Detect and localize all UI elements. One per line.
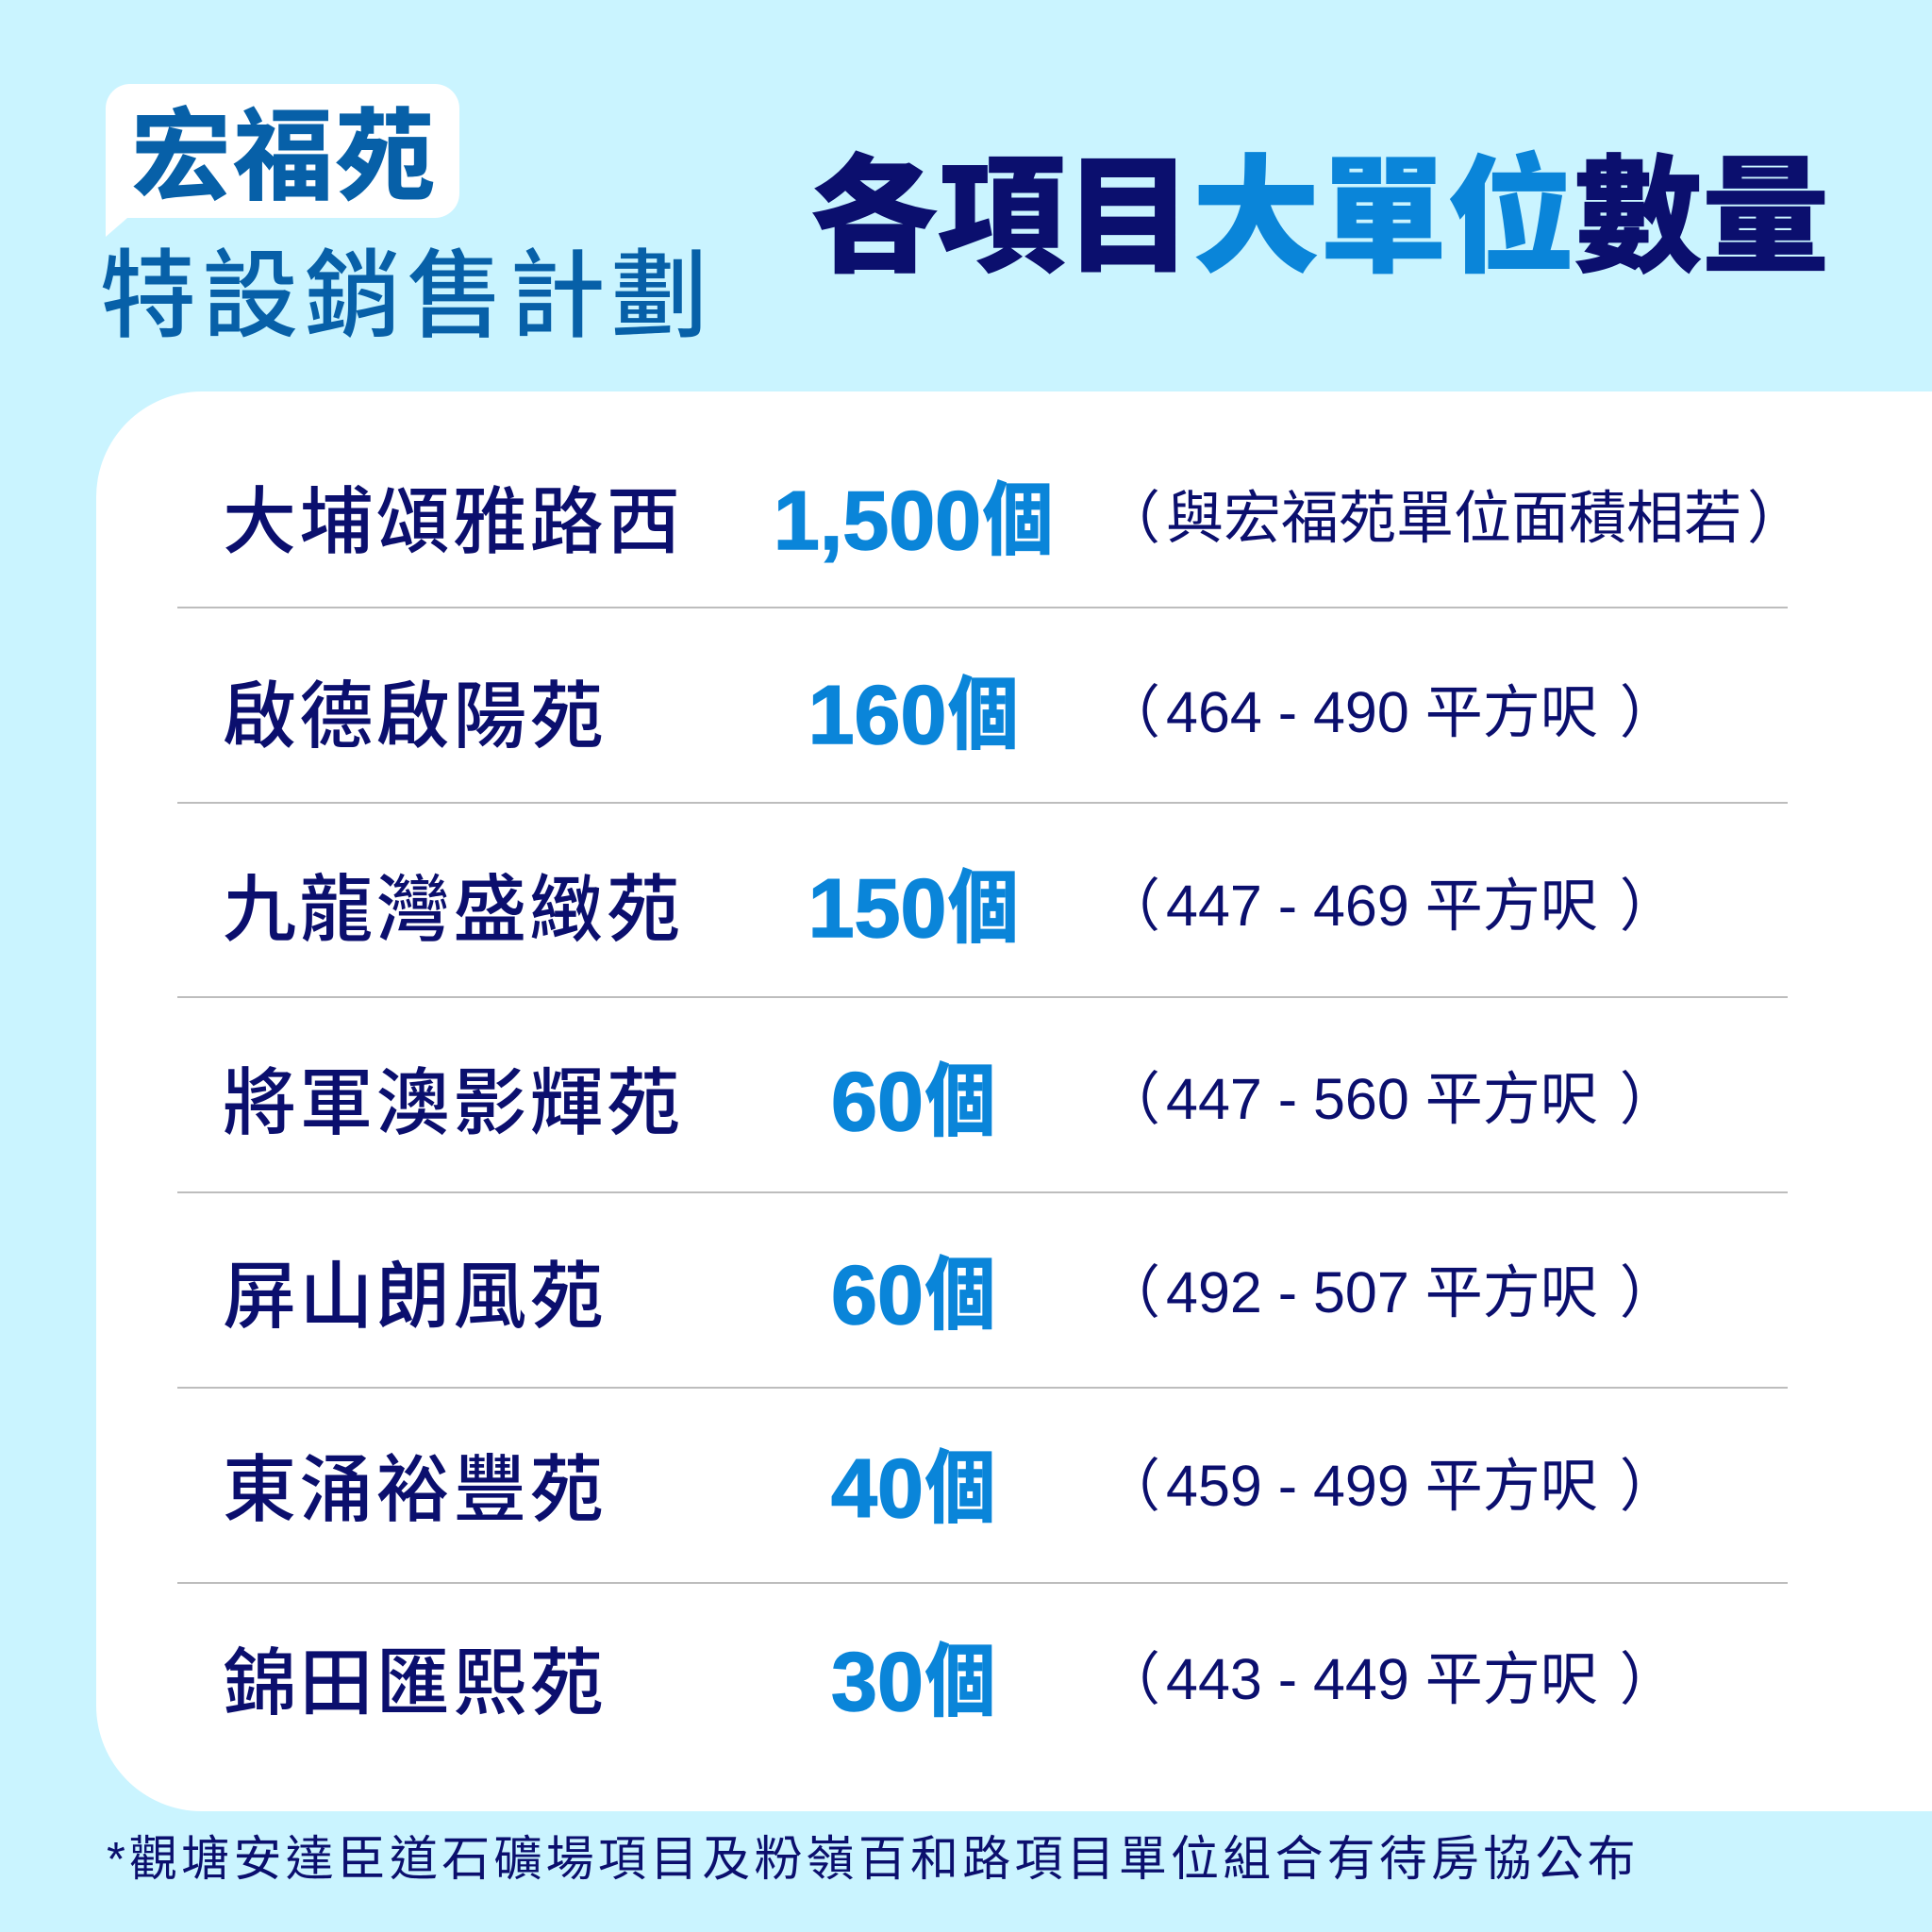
table row: 啟德啟陽苑: 啟德啟陽苑 [223,658,607,763]
table row: 大埔頌雅路西: （與宏福苑單位面積相若） [1103,486,1805,550]
callout: speech bubble with estate name: 宏福苑 [131,75,437,221]
table row: 九龍灣盛緻苑 [223,843,1677,958]
table row: 東涌裕豐苑: 個 [925,1424,995,1539]
table row: 屏山朗風苑: 個 [925,1230,995,1345]
table row: 將軍澳影輝苑: 個 [925,1037,995,1152]
table row: 錦田匯熙苑: 個 [925,1617,995,1732]
table row: 錦田匯熙苑: （443 - 449 平方呎 ） [1103,1647,1677,1711]
table row: 東涌裕豐苑: 40 [831,1441,924,1535]
table row: 將軍澳影輝苑 [223,1037,1677,1152]
table row: 屏山朗風苑 [223,1230,1677,1345]
table row: 大埔頌雅路西: 1,500 [774,474,981,567]
table row: 九龍灣盛緻苑: 個 [948,843,1018,958]
table row: 九龍灣盛緻苑: （447 - 469 平方呎 ） [1103,874,1677,938]
table row: 啟德啟陽苑: 個 [948,650,1018,765]
table row: 東涌裕豐苑: 東涌裕豐苑 [223,1431,607,1537]
footnote: *觀塘安達臣道石礦場項目及粉嶺百和路項目單位組合有待房協公布 [107,1832,1640,1886]
table row: 大埔頌雅路西: 大埔頌雅路西 [223,463,683,569]
table row: 東涌裕豐苑 [223,1424,1677,1539]
table row: 啟德啟陽苑: 160 [808,668,946,761]
table row: 屏山朗風苑: 60 [831,1248,924,1341]
table row: 大埔頌雅路西 [223,456,1805,571]
table row: 將軍澳影輝苑: 60 [831,1055,924,1148]
table row: 錦田匯熙苑 [223,1617,1677,1732]
table row: 屏山朗風苑: 屏山朗風苑 [223,1238,607,1343]
table row: 將軍澳影輝苑: 將軍澳影輝苑 [223,1044,683,1150]
title: 各項目大單位數量 [810,113,1829,298]
table row: 將軍澳影輝苑: （447 - 560 平方呎 ） [1103,1067,1677,1131]
table row: 啟德啟陽苑: （464 - 490 平方呎 ） [1103,680,1677,744]
panel: white table card [96,391,1932,1811]
table row: 東涌裕豐苑: （459 - 499 平方呎 ） [1103,1454,1677,1518]
heading: scheme name: 特設銷售計劃 [100,219,713,358]
table row: 啟德啟陽苑 [223,650,1677,765]
table row: 九龍灣盛緻苑: 九龍灣盛緻苑 [223,851,683,957]
table row: 錦田匯熙苑: 錦田匯熙苑 [223,1624,607,1730]
table row: 九龍灣盛緻苑: 150 [808,861,946,955]
table row: 屏山朗風苑: （492 - 507 平方呎 ） [1103,1260,1677,1324]
table row: 大埔頌雅路西: 個 [983,456,1053,571]
table row: 錦田匯熙苑: 30 [831,1635,924,1728]
